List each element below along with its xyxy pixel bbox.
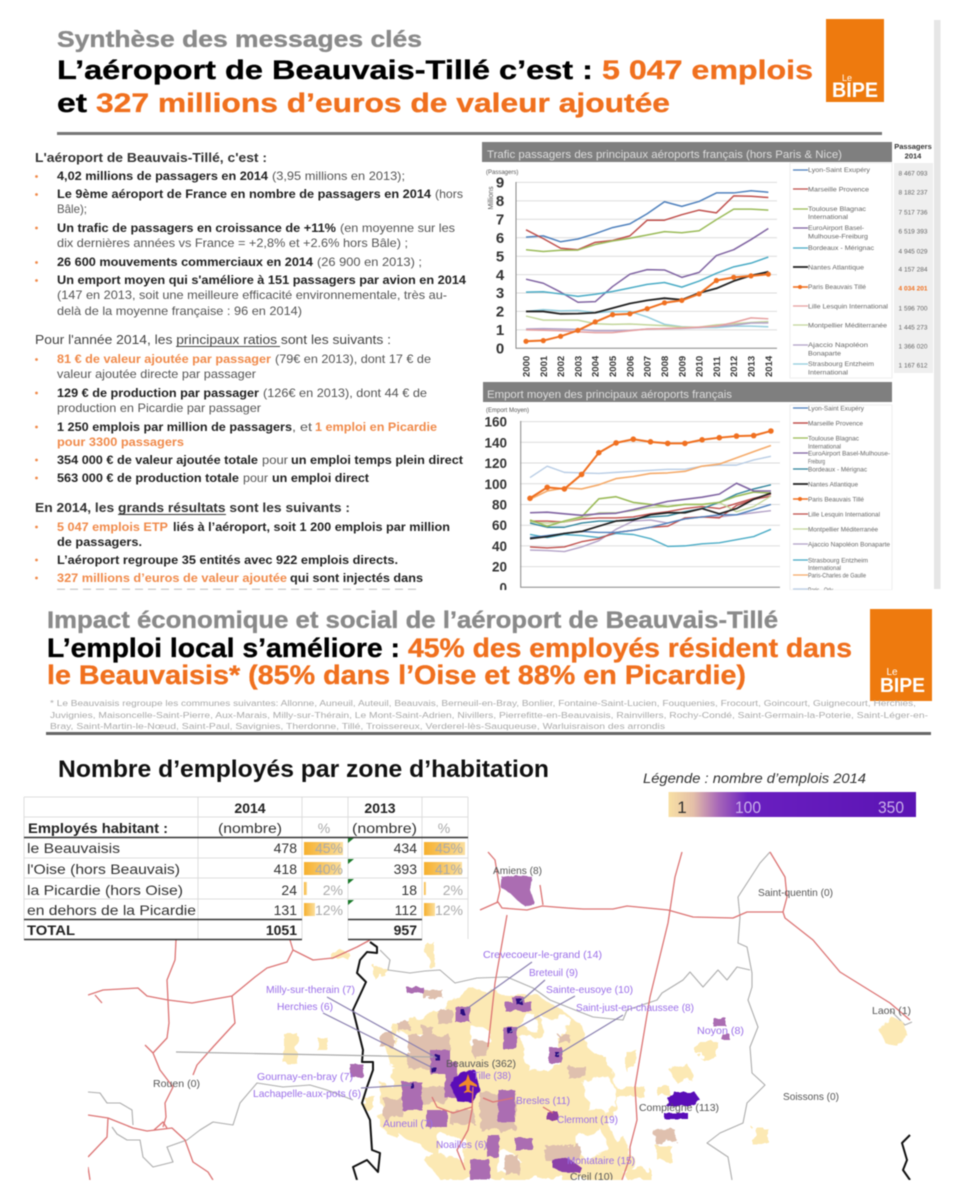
table: employees by residential zone [24,797,468,940]
city labels: Milly-sur-therain (7) [266,984,355,996]
passengers 2014 column: 1 596 700 [899,306,928,312]
table rows: 957 [394,922,417,938]
bullets: airport facts: (hors [435,187,463,201]
roads [88,852,910,1180]
table rows: 18 [401,882,417,898]
y axis labels: 3 [496,285,504,302]
y axis labels: 0 [499,580,507,596]
legend: Nantes Atlantique [808,264,864,272]
table rows: 1051 [266,922,297,938]
panel: average load chart [483,382,892,596]
title: 5 047 emplois [602,55,813,85]
data bars [304,842,465,916]
legend: Bordeaux - Mérignac [808,466,868,474]
table header: (nombre) [352,820,417,836]
passengers 2014 column: 4 945 029 [899,248,928,256]
text block: key messages [35,151,466,589]
legend: EuroAirport Basel-Mulhouse- [808,450,890,458]
results heading: En 2014, les grands résultats sont les suivants : [35,501,350,515]
y axis labels: 4 [496,267,505,284]
passengers 2014 column: Passagers [894,142,932,151]
bullets: airport facts: Bâle); [57,202,87,216]
chart heading: Trafic passagers des principaux aéroports français (hors Paris & Nice) [487,149,842,161]
city labels: Beauvais (362) [446,1058,516,1070]
table rows: l'Oise (hors Beauvais) [27,861,180,877]
city labels: Gournay-en-bray (7) [257,1071,353,1083]
legend: EuroAirport Basel- [808,225,864,232]
axis titles: (Passagers) [486,170,518,176]
x axis years: 2014 [764,355,775,377]
logo: Le BIPE: Le [886,667,898,678]
chart heading [482,142,892,162]
city labels: Montataire (15) [567,1155,635,1167]
city labels: Tille (38) [473,1070,511,1082]
map legend [643,770,916,817]
yellow commune: Laon [879,1017,907,1046]
y axis labels: 40 [492,539,507,554]
y axis labels [484,414,507,596]
axis title: (Emport Moyen) [486,408,529,414]
y axis labels: 8 [496,193,504,210]
passengers 2014 column [894,142,933,373]
legend: Lille Lesquin International [808,512,880,518]
bullets: airport facts: (3,95 millions en 2013); [272,169,405,183]
logo: Le BIPE [870,609,932,701]
y axis labels [496,174,505,358]
y axis labels: 140 [484,436,507,450]
legend: Ajaccio Napoléon [808,342,868,349]
leader lines [176,962,623,1088]
table header [28,800,450,836]
legend [790,163,892,378]
legend: International [808,565,841,572]
bullets: ratios: (126€ en 2013), dont 44 € de [263,386,427,400]
legend: Lille Lesquin International [808,304,888,310]
bullets: results: de passagers. [57,535,142,549]
legend [790,405,892,594]
title: et [57,88,87,118]
title: L’aéroport de Beauvais-Tillé c’est : [57,55,593,85]
table header: Employés habitant : [28,820,168,836]
legend: Toulouse Blagnac [808,206,867,213]
title: L’emploi local s’améliore : [47,633,400,663]
tan communes [380,990,676,1175]
table rows: 112 [395,902,417,918]
table rows: 478 [274,840,297,856]
bullets: ratios: 354 000 € de valeur ajoutée totale [57,453,258,467]
city labels: Soissons (0) [783,1091,839,1103]
table header: % [318,820,330,836]
logo: Le BIPE: BIPE [880,675,925,697]
passengers 2014 column: 4 034 201 [899,286,928,292]
bullets: ratios: production en Picardie par passager [57,401,261,415]
table rows: 45% [435,840,463,856]
footnote [50,698,928,731]
line series [530,431,771,552]
table rows: la Picardie (hors Oise) [27,882,183,898]
legend: Bordeaux - Mérignac [808,245,875,252]
city labels: Crevecoeur-le-grand (14) [483,949,602,961]
city labels: Rouen (0) [153,1078,200,1090]
y axis labels: 7 [496,212,504,228]
map legend: 1 [677,798,687,817]
table header: (nombre) [218,820,282,836]
bullets: airport facts: (en moyenne sur les [340,221,455,235]
table rows: le Beauvaisis [27,840,120,856]
passengers 2014 column: 2014 [905,152,922,160]
icon: airplane [459,1074,477,1093]
table rows: 2% [323,882,343,898]
bullets: airport facts [35,169,466,318]
table rows: 131 [274,902,297,918]
y axis labels: 60 [492,518,507,533]
city labels: Laon (1) [872,1005,911,1017]
mauve communes [350,875,730,1180]
table header: 2014 [234,800,266,816]
footnote: * Le Beauvaisis regroupe les communes suivantes: Allonne, Auneuil, Auteuil, Beauvais, Berneuil-en-Bray, Bonlier, Fontaine-Saint-Lucien, Fouquenies, Frocourt, Goincourt, Guignecourt, Herchies, [50,698,916,708]
map legend: 350 [878,798,904,817]
map legend: Légende : nombre d’emplois 2014 [643,770,866,786]
passengers 2014 column: 7 517 736 [899,210,928,216]
x axis years: 2012 [729,356,740,377]
bullets: ratios: , et [292,420,313,434]
bullets: results: 327 millions d’euros de valeur ajoutée [57,571,287,585]
table rows: 418 [274,861,297,877]
y axis labels: 20 [492,560,507,574]
table header: 2013 [364,800,396,816]
bullets: airport facts: Un trafic de passagers en croissance de +11% [57,221,336,235]
subheading: Nombre d’employés par zone d’habitation [58,756,549,783]
legend: International [808,370,849,376]
overline heading: Synthèse des messages clés [57,26,422,52]
legend: Paris - Orly [808,587,833,594]
legend: Paris-Charles de Gaulle [808,572,866,580]
bullets: results [35,520,450,585]
bullets: ratios: pour [262,453,288,467]
city labels: Saint-quentin (0) [758,887,833,899]
y axis labels: 9 [496,174,504,192]
panel: passenger traffic chart [482,142,933,378]
passengers 2014 column: 1 366 020 [899,344,928,350]
bullets: ratios: pour 3300 passagers [57,435,184,449]
dark commune centres [410,999,559,1088]
table rows: 41% [435,861,463,877]
map holes [379,1013,626,1180]
title: 327 millions d’euros de valeur ajoutée [96,88,670,118]
city labels: Noyon (8) [697,1025,744,1037]
y axis labels: 6 [496,230,504,247]
bullets: ratios: 1 250 emplois par million de passagers [57,420,292,434]
y axis labels: 0 [496,340,504,358]
legend: Strasbourg Entzheim [808,558,868,564]
footnote: Juvignies, Maisoncelle-Saint-Pierre, Aux-Marais, Milly-sur-Thérain, Le Mont-Saint-Adrien, Nivillers, Pierrefitte-en-Beauvaisis, Rainvillers, Rochy-Condé, Saint-Germain-la-Poterie, Saint-Léger-en- [50,710,928,720]
gray borders [88,852,912,1180]
table rows: 24 [281,882,297,898]
map legend: 100 [735,798,761,817]
city labels [153,865,911,1191]
legend: Nantes Atlantique [808,482,858,488]
table rows: 434 [394,840,417,856]
y axis labels: 80 [492,498,507,512]
legend: Montpellier Méditerranée [808,526,878,534]
y axis labels: 160 [484,414,507,430]
y axis labels: 120 [484,456,507,471]
bullets: airport facts: (147 en 2013, soit une meilleure efficacité environnementale, très au- [57,288,447,302]
bullets: results: L’aéroport regroupe 35 entités avec 922 emplois directs. [57,553,398,567]
x axis years: 2004 [591,355,602,377]
city labels: Amiens (8) [493,865,542,877]
passengers 2014 column: 4 157 284 [899,266,928,274]
table header: % [438,820,450,836]
table rows: 2% [443,882,463,898]
passengers 2014 column: 8 467 093 [899,170,928,178]
x axis years: 2006 [625,356,636,377]
logo: Le BIPE: BIPE [832,79,878,102]
y axis labels: 5 [496,248,504,266]
table rows: 12% [315,902,343,918]
city labels: Auneuil (7) [383,1118,433,1130]
city labels: Sainte-eusoye (10) [546,984,633,996]
axis titles: Millions [488,186,495,210]
legend: Ajaccio Napoléon Bonaparte [808,542,890,548]
x axis years: 2013 [746,356,758,377]
line series [526,191,768,341]
x axis years: 2011 [712,356,723,377]
city labels: Compiègne (113) [639,1102,719,1114]
table rows [27,840,463,938]
map [88,852,912,1191]
table rows: 12% [435,902,463,918]
legend: Paris Beauvais Tillé [808,496,864,504]
bullets: ratios: 81 € de valeur ajoutée par passager [57,352,271,366]
deep purple communes: Tillé, Beauvais, Compiègne [450,1070,700,1119]
city labels: Mouy (9) [432,1179,470,1191]
legend: Marseille Provence [808,186,869,194]
legend: International [808,214,849,221]
city labels: Clermont (19) [557,1114,618,1126]
bullets: ratios [35,352,463,485]
bullets: airport facts: (26 900 en 2013) ; [317,255,422,269]
legend: Mulhouse-Freiburg [808,234,868,240]
logo: Le BIPE [826,19,884,102]
city labels: Noailles (6) [436,1139,487,1151]
y axis labels: 100 [484,477,507,492]
bullets: ratios: (79€ en 2013), dont 17 € de [275,352,431,366]
table rows: 393 [394,861,417,877]
x axis years: 2007 [643,356,654,377]
chart heading [483,382,892,402]
title: 45% des employés résident dans [408,633,852,663]
legend: Freiburg [808,458,825,466]
legend: International [808,444,841,450]
city labels: Creil (10) [570,1171,613,1183]
x axis years: 2003 [573,356,584,377]
bullets: results: qui sont injectés dans [290,571,423,585]
city labels: Bresles (11) [516,1095,570,1107]
bullets: airport facts: delà de la moyenne française : 96 en 2014) [57,304,302,318]
x axis years: 2005 [608,355,619,377]
chart heading: Emport moyen des principaux aéroports français [487,389,733,401]
overline heading: Impact économique et social de l’aéroport de Beauvais-Tillé [47,607,778,634]
logo: Le BIPE: Le [842,73,852,83]
Paris Beauvais markers [527,428,774,501]
legend: Lyon-Saint Exupéry [808,167,871,174]
yellow communes [283,943,768,1180]
legend: Marseille Provence [808,420,863,428]
bullets: ratios: valeur ajoutée directe par passager [57,367,256,381]
Paris Beauvais markers [523,272,771,344]
y axis labels: 2 [496,304,504,320]
passengers 2014 column: 6 519 393 [899,228,928,236]
legend: Bonaparte [808,350,841,358]
axis titles [486,170,518,210]
legend: Montpellier Méditerranée [808,322,887,330]
bullets: ratios: un emploi direct [272,471,369,485]
x axis years: 2002 [556,356,567,377]
bullets: airport facts: Le 9ème aéroport de France en nombre de passagers en 2014 [57,187,431,201]
header: synthèse [57,26,813,118]
x axis years: 2009 [677,356,688,377]
bullets: results: 5 047 emplois ETP [57,520,168,534]
bullets: airport facts: 26 600 mouvements commerciaux en 2014 [57,255,313,269]
legend: Strasbourg Entzheim [808,361,874,368]
header: impact [47,607,852,690]
city labels: Herchies (6) [277,1001,333,1013]
bullets: ratios: 1 emploi en Picardie [315,420,437,434]
regional border [353,942,910,1180]
title [57,55,813,118]
legend: Paris Beauvais Tillé [808,284,866,291]
passengers 2014 column: 1 445 273 [899,324,928,332]
city labels: Saint-just-en-chaussee (8) [576,1002,694,1014]
y axis labels: 1 [496,322,504,339]
x axis years: 2010 [695,356,706,377]
bullets: ratios: un emploi temps plein direct [291,453,463,467]
bullets: airport facts: Un emport moyen qui s'améliore à 151 passagers par avion en 2014 [57,273,466,287]
bullets: airport facts: 4,02 millions de passagers en 2014 [57,169,268,183]
x axis years: 2001 [539,355,550,377]
table rows: TOTAL [27,922,75,938]
passengers 2014 column: 8 182 237 [899,190,928,196]
table rows: 40% [315,861,343,877]
footnote: Bray, Saint-Martin-le-Nœud, Saint-Paul, Savignies, Therdonne, Tillé, Troissereux, Verderel-lès-Sauqueuse, Warluisraison des arrondis [50,721,665,731]
bullets: ratios: 563 000 € de production totale [57,471,239,485]
ratios heading: Pour l'année 2014, les principaux ratios sont les suivants : [35,333,391,347]
title: le Beauvaisis* (85% dans l’Oise et 88% en Picardie) [47,660,746,690]
passengers 2014 column: 1 167 612 [899,362,928,370]
legend: Lyon-Saint Exupéry [808,406,865,412]
bullets: ratios: 129 € de production par passager [57,386,259,400]
title [47,633,852,690]
bullets: airport facts: dix dernières années vs France = +2,8% et +2.6% hors Bâle) ; [57,236,408,250]
city labels: Lachapelle-aux-pots (6) [253,1088,361,1100]
intro heading: L'aéroport de Beauvais-Tillé, c'est : [35,151,267,165]
bullets: ratios: pour [243,471,268,485]
right gray band [934,20,940,589]
bullets: results: liés à l’aéroport, soit 1 200 emplois par million [173,520,450,534]
table rows: 45% [315,840,343,856]
legend: Toulouse Blagnac [808,436,860,442]
table rows: en dehors de la Picardie [27,902,196,918]
city labels: Breteuil (9) [529,967,578,979]
x axis years: 2008 [660,356,671,377]
x axis years: 2000 [522,356,532,377]
x axis years [522,355,775,377]
